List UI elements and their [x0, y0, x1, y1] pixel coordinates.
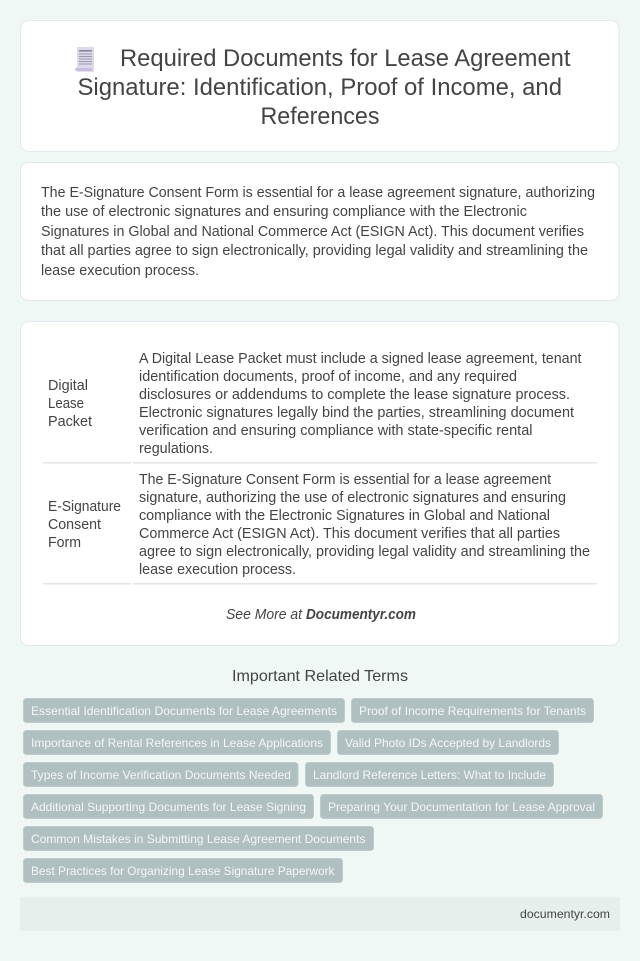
tag: Common Mistakes in Submitting Lease Agreement Documents: [31, 832, 366, 846]
panel: table card: [20, 322, 619, 646]
tag: Valid Photo IDs Accepted by Landlords: [345, 736, 551, 750]
row description: regulations.: [139, 441, 213, 457]
row label: Consent: [48, 517, 101, 533]
intro text block: that all parties agree to sign electronically, providing legal validity and streamlining the: [41, 243, 588, 259]
intro text block: The E-Signature Consent Form is essential for a lease agreement signature, authorizing: [41, 185, 595, 201]
title: Required Documents for Lease Agreement: [120, 45, 571, 72]
row description: [139, 472, 590, 578]
see more link: Documentyr.com: [306, 607, 416, 623]
row description: identification documents, proof of income, and any required: [139, 369, 517, 385]
tag: [352, 698, 594, 722]
row label: Lease: [48, 396, 84, 412]
icon: document scroll: [75, 47, 94, 72]
footer: documentyr.com: [520, 907, 610, 921]
row description: lease execution process.: [139, 562, 296, 578]
tag: [306, 762, 554, 786]
row label: E-Signature: [48, 499, 121, 515]
tag: [24, 794, 314, 818]
tag: Landlord Reference Letters: What to Include: [313, 768, 546, 782]
title: [78, 45, 571, 130]
intro text block: lease execution process.: [41, 263, 199, 279]
row description: agree to sign electronically, providing legal validity and streamlining the: [139, 544, 590, 560]
intro text block: [41, 185, 595, 279]
row label: Form: [48, 535, 81, 551]
intro text block: Signatures in Global and National Commerce Act (ESIGN Act). This document verifies: [41, 224, 584, 240]
title: References: [260, 103, 380, 130]
row description: The E-Signature Consent Form is essential for a lease agreement: [139, 472, 551, 488]
tag: [320, 794, 602, 818]
tag: Additional Supporting Documents for Lease Signing: [31, 800, 306, 814]
row description: verification and ensuring compliance with state-specific rental: [139, 423, 532, 439]
row description: A Digital Lease Packet must include a signed lease agreement, tenant: [139, 351, 582, 367]
tag: [24, 762, 298, 786]
row label: [48, 499, 121, 551]
tag: [24, 826, 374, 850]
title: Signature: Identification, Proof of Income, and: [78, 74, 562, 101]
see more link: See More at: [226, 607, 303, 623]
intro text block: the use of electronic signatures and ensuring compliance with the Electronic: [41, 204, 527, 220]
see more link: [226, 607, 416, 623]
row label: [48, 378, 92, 430]
row description: [139, 351, 582, 457]
tag: Best Practices for Organizing Lease Signature Paperwork: [31, 864, 335, 878]
table row: E-Signature Consent Form: [48, 472, 590, 578]
tag: [338, 730, 558, 754]
heading: related terms: Important Related Terms: [232, 668, 408, 685]
panel: title card: [20, 20, 619, 152]
tag: [24, 730, 330, 754]
footer: [20, 897, 620, 931]
table row: Digital Lease Packet: [48, 351, 582, 457]
row label: Digital: [48, 378, 88, 394]
row label: Packet: [48, 414, 92, 430]
row description: compliance with the Electronic Signatures in Global and National: [139, 508, 550, 524]
tag: Proof of Income Requirements for Tenants: [359, 704, 586, 718]
tag: Importance of Rental References in Lease Applications: [31, 736, 323, 750]
row description: Commerce Act (ESIGN Act). This document verifies that all parties: [139, 526, 560, 542]
related term tags: [24, 698, 602, 882]
panel: intro text card: [20, 162, 619, 300]
row description: signature, authorizing the use of electronic signatures and ensuring: [139, 490, 566, 506]
row description: Electronic signatures legally bind the parties, streamlining document: [139, 405, 574, 421]
tag: Types of Income Verification Documents Needed: [31, 768, 291, 782]
tag: [24, 698, 344, 722]
tag: [24, 858, 342, 882]
row description: disclosures or addendums to complete the lease signature process.: [139, 387, 570, 403]
tag: Preparing Your Documentation for Lease Approval: [328, 800, 595, 814]
tag: Essential Identification Documents for Lease Agreements: [31, 704, 337, 718]
